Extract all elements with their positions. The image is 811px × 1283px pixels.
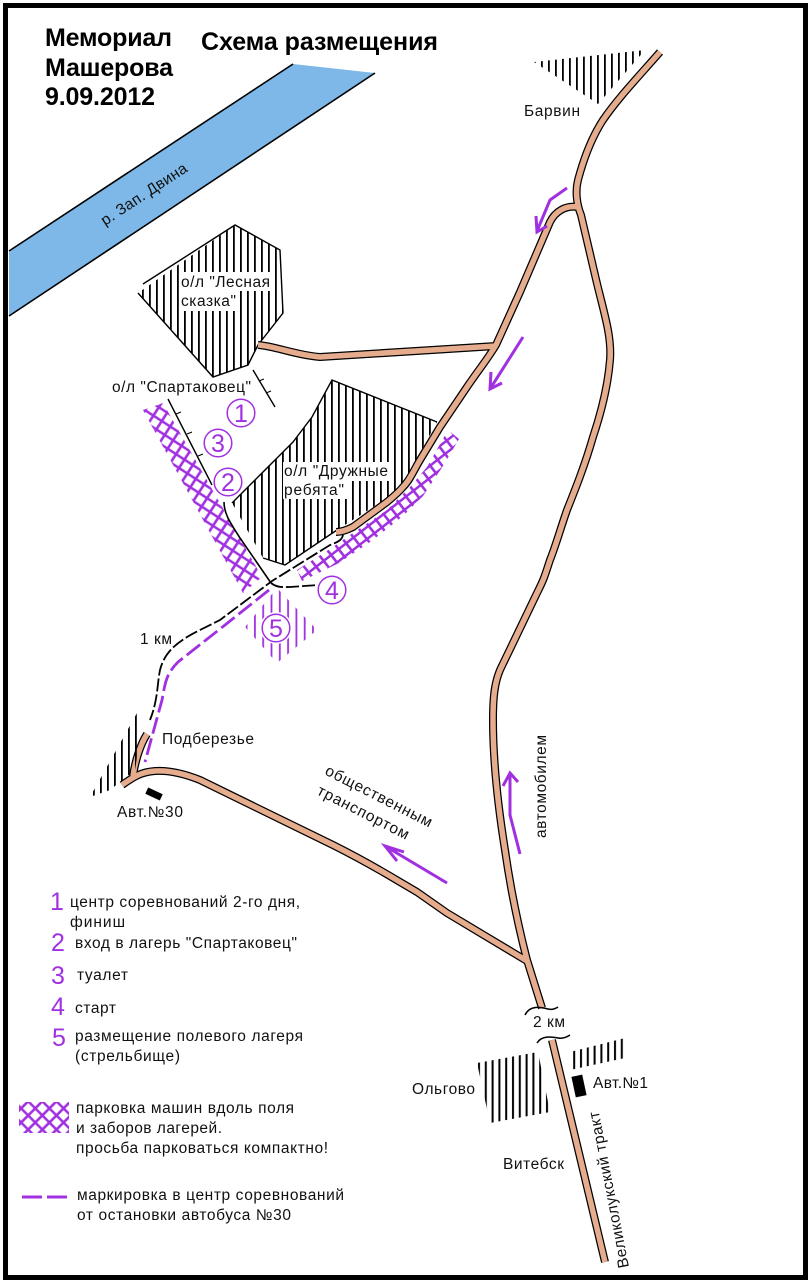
numbered markers on the map: 5 [269, 615, 283, 643]
area: Barvin village hatch [534, 50, 645, 104]
purple marking route [145, 590, 269, 762]
numbered markers on the map: 3 [211, 430, 225, 458]
label: Vitebsk: Витебск [503, 1156, 564, 1173]
area: camp Druzhnye Rebyata: ребята" [284, 482, 344, 499]
legend: marking: маркировка в центр соревнований [77, 1187, 344, 1204]
area: camp Druzhnye Rebyata: о/л "Дружные [284, 463, 388, 480]
legend: item 4: 4 [51, 993, 65, 1021]
label: camp Spartakovets: о/л "Спартаковец" [112, 379, 251, 396]
black dashed track to start [271, 583, 318, 587]
field camp zone [245, 588, 317, 663]
legend: item 2: 2 [51, 929, 65, 957]
numbered markers on the map: 4 [325, 577, 339, 605]
legend: item 1: 1 [50, 888, 64, 916]
river: Western Dvina: р. Зап. Двина [98, 160, 191, 229]
title: memorial name and date: Машерова [45, 54, 174, 82]
bus stop 1 [571, 1075, 587, 1097]
area: hatch east of the road [570, 1038, 625, 1070]
legend: parking: просьба парковаться компактно! [76, 1140, 328, 1157]
label: Olgovo: Ольгово [412, 1081, 475, 1098]
legend: parking: и заборов лагерей. [76, 1120, 222, 1137]
arrow: route from Barvin [536, 188, 567, 232]
legend: item 5: 5 [52, 1024, 66, 1052]
parking strip along the Spartakovets fence [143, 403, 262, 593]
label: by public transport: общественным [322, 762, 435, 831]
legend: item 5: (стрельбище) [75, 1048, 180, 1065]
label: Velikoluksky road: Великолукский тракт [586, 1110, 633, 1269]
label: 1 km: 1 км [140, 631, 172, 648]
road break: 2 km [525, 1007, 570, 1043]
title: memorial name and date [45, 24, 174, 111]
arrow: by public transport [385, 846, 447, 883]
label: bus 30: Авт.№30 [117, 804, 183, 821]
area: camp Lesnaya Skazka: сказка" [181, 293, 236, 310]
area: camp Lesnaya Skazka: о/л "Лесная [181, 274, 270, 291]
arrow: by car [503, 773, 520, 854]
area: Olgovo village hatch [477, 1052, 550, 1123]
legend: item 2: вход в лагерь "Спартаковец" [75, 935, 297, 952]
title: memorial name and date: 9.09.2012 [45, 83, 155, 111]
label: by car: автомобилем [533, 735, 550, 838]
river: Western Dvina [9, 64, 375, 316]
fences of camp Spartakovets [168, 370, 275, 485]
heading: layout scheme: Схема размещения [201, 28, 438, 56]
title: memorial name and date: Мемориал [45, 24, 172, 52]
legend: item 1 [50, 888, 300, 931]
legend: item 5: размещение полевого лагеря [75, 1028, 303, 1045]
footpath from camp entrance [224, 502, 271, 583]
area: Podberezye village hatch [90, 713, 139, 797]
arrow: towards camps [490, 337, 523, 389]
legend: item 3: 3 [51, 962, 65, 990]
label: bus 1: Авт.№1 [593, 1075, 648, 1092]
label: Podberezye: Подберезье [162, 731, 254, 748]
legend: parking [19, 1100, 328, 1157]
numbered markers on the map [204, 399, 346, 644]
numbered markers on the map: 1 [234, 400, 248, 428]
area: camp Druzhnye Rebyata [232, 380, 437, 565]
legend: item 2 [51, 929, 297, 957]
legend: parking: парковка машин вдоль поля [76, 1100, 294, 1117]
legend: item 1: центр соревнований 2-го дня, [70, 894, 300, 911]
numbered markers on the map: 2 [221, 469, 235, 497]
legend: item 3 [51, 962, 128, 990]
label: Barvin: Барвин [524, 103, 580, 120]
black dashed track to Podberezye [150, 535, 343, 720]
legend: marking [22, 1187, 344, 1224]
legend: marking: от остановки автобуса №30 [77, 1207, 291, 1224]
legend: item 5 [52, 1024, 303, 1065]
bus stop 30 [145, 787, 163, 801]
road network [122, 52, 660, 1262]
legend: item 4: старт [75, 1000, 116, 1017]
parking strip along the Druzhnye Rebyata fence [297, 430, 459, 581]
area: camp Lesnaya Skazka [138, 225, 283, 377]
legend: item 1: финиш [70, 914, 125, 931]
legend: item 3: туалет [77, 967, 128, 984]
road break: 2 km: 2 км [533, 1014, 565, 1031]
label: by public transport: транспортом [314, 782, 412, 843]
legend: item 4 [51, 993, 116, 1021]
